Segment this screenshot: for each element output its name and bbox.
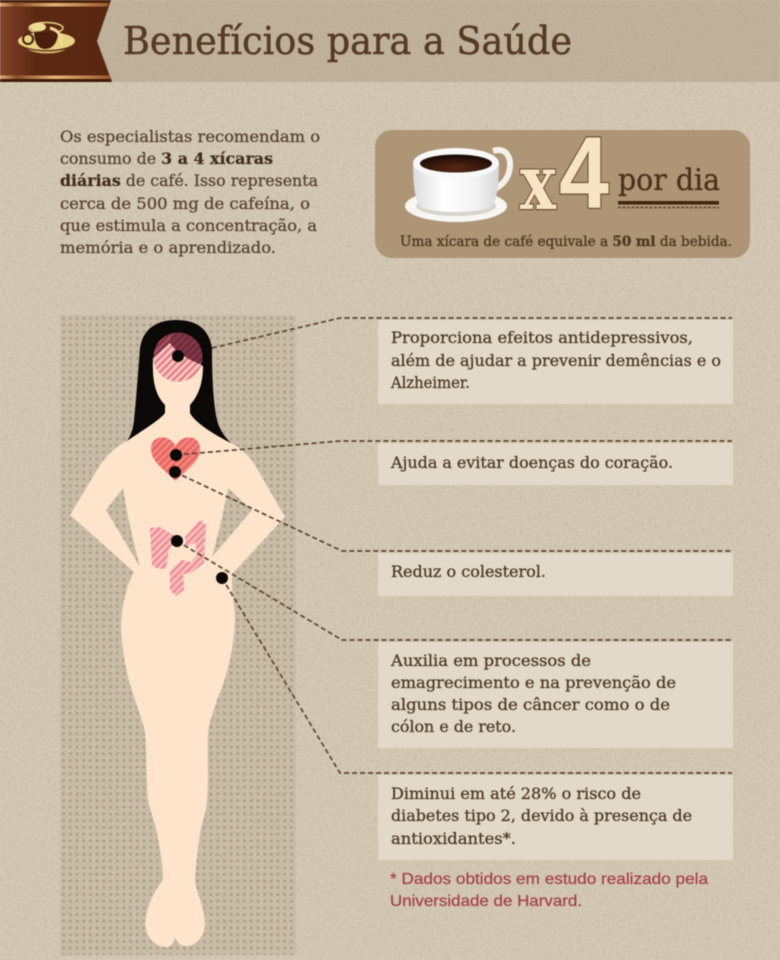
panel: antidepressant benefit: Proporciona efeitos antidepressivos, — [391, 328, 693, 347]
face — [153, 343, 203, 405]
hair back — [127, 320, 231, 443]
por dia label: por dia — [618, 163, 720, 198]
panel: weight loss and cancer benefit: cólon e de reto. — [391, 717, 516, 736]
intestine highlight — [150, 520, 206, 596]
panel: weight loss and cancer benefit: emagrecimento e na prevenção de — [391, 673, 676, 692]
panel: weight loss and cancer benefit: alguns tipos de câncer como o de — [391, 695, 670, 714]
panel: antidepressant benefit: Alzheimer. — [390, 373, 470, 392]
intro text block: cerca de 500 mg de cafeína, o — [60, 194, 310, 213]
panel: weight loss and cancer benefit: Auxilia em processos de — [390, 651, 591, 670]
intro text block: diárias de café. Isso representa — [60, 171, 318, 190]
panel: heart benefit: Ajuda a evitar doenças do coração. — [390, 453, 673, 472]
panel: four cups a day — [375, 116, 750, 258]
multiplier x4: x — [520, 138, 557, 227]
header band — [0, 0, 780, 82]
dotted backdrop behind figure — [60, 315, 296, 955]
panel: weight loss and cancer benefit — [378, 642, 733, 748]
human figure — [70, 320, 285, 947]
intro text block: consumo de 3 a 4 xícaras — [60, 149, 273, 168]
panel: heart benefit — [378, 443, 733, 485]
panel: diabetes benefit: Diminui em até 28% o risco de — [391, 784, 641, 803]
panel: antidepressant benefit — [378, 320, 733, 404]
marker dots — [169, 350, 228, 584]
intro text block: memória e o aprendizado. — [60, 238, 276, 257]
footnote: Universidade de Harvard. — [390, 893, 582, 910]
icon: white coffee cup on saucer — [405, 148, 510, 222]
multiplier x4: 4 — [559, 116, 609, 230]
cup caption: Uma xícara de café equivale a 50 ml da bebida. — [400, 234, 732, 250]
intro text block: Os especialistas recomendam o — [60, 127, 320, 146]
panel: diabetes benefit: diabetes tipo 2, devido à presença de — [391, 806, 692, 825]
connector lines — [175, 318, 732, 773]
panel: antidepressant benefit: além de ajudar a prevenir demências e o — [391, 351, 721, 370]
panel: cholesterol benefit: Reduz o colesterol. — [391, 562, 546, 581]
body silhouette — [70, 403, 285, 947]
panel: diabetes benefit — [378, 775, 733, 860]
intro text block: que estimula a concentração, a — [60, 216, 317, 235]
title: Benefícios para a Saúde — [123, 19, 572, 63]
footnote: * Dados obtidos em estudo realizado pela — [390, 871, 708, 888]
heart highlight — [151, 437, 200, 481]
header ribbon with cup icon — [0, 0, 112, 82]
brain highlight — [152, 332, 204, 382]
footnote — [390, 871, 708, 910]
panel: cholesterol benefit — [378, 553, 733, 596]
multiplier x4 — [520, 116, 609, 230]
icon: coffee cup — [18, 22, 75, 54]
intro text block — [60, 127, 320, 257]
panel: diabetes benefit: antioxidantes*. — [391, 829, 516, 848]
